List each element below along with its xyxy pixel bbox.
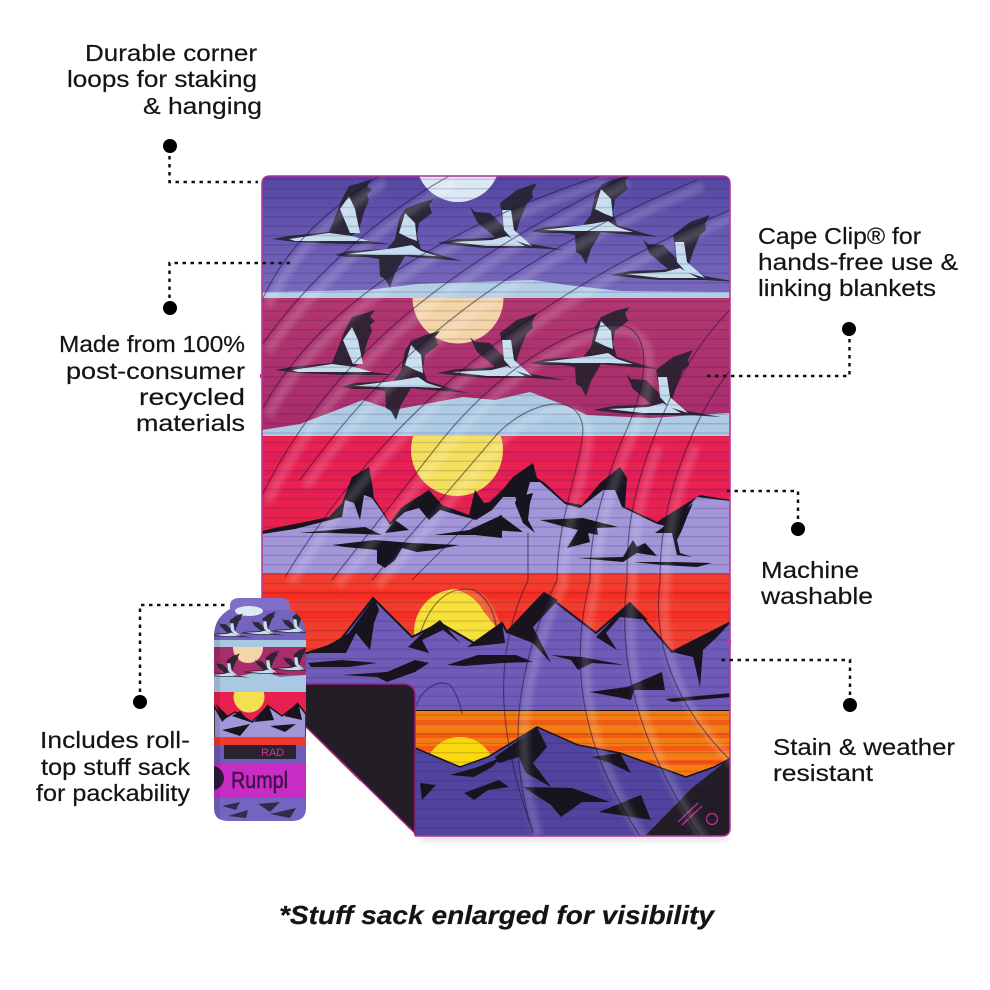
pale hills top: [262, 280, 730, 298]
heading: corner loops: & hanging: [143, 93, 262, 119]
band: purple sky: [262, 176, 730, 298]
moon: [420, 176, 496, 202]
heading: stain resistant: [773, 734, 955, 786]
folded underside: [306, 683, 418, 836]
heading: machine washable: [760, 557, 873, 609]
sack sleeve: [214, 763, 306, 798]
heading: cape clip: [758, 223, 958, 301]
sack lower purple: [214, 746, 306, 764]
heading: cape clip: Cape Clip® for: [758, 223, 921, 249]
band: orange sky: [262, 711, 730, 781]
corner logo: [678, 803, 718, 825]
lavender mountains: [262, 482, 730, 573]
sun: yellow low: [430, 737, 490, 766]
black shapes middle: [308, 592, 731, 702]
sack shading: [214, 597, 220, 823]
sack body purple: [214, 597, 306, 823]
sack cap: [228, 598, 292, 610]
stuff sack: [214, 598, 306, 821]
sack orange band: [214, 737, 306, 746]
heading: machine washable: Machine: [761, 557, 859, 583]
dark purple mountains: [415, 727, 733, 838]
band: red orange sky: [262, 573, 730, 652]
heading: corner loops: [67, 40, 262, 119]
band: magenta sky: [262, 298, 730, 436]
sack label: [224, 745, 296, 759]
sun lobe highlight: [456, 588, 499, 626]
band: red sky: [262, 436, 730, 531]
stripes: [262, 176, 730, 836]
sack birds two: [214, 648, 306, 678]
sun: yellow middle: [414, 589, 500, 642]
corner patch: [645, 758, 730, 836]
sack label text: RAD: [261, 747, 284, 759]
birds row one: [272, 175, 738, 288]
sack mountains: [214, 704, 306, 738]
purple mountains: [262, 593, 731, 711]
leader: recycled: [163, 263, 290, 315]
heading: recycled materials: post-consumer: [66, 358, 245, 384]
quilting soft highlights: [268, 182, 736, 842]
heading: stain resistant: resistant: [773, 760, 874, 786]
heading: corner loops: loops for staking: [67, 66, 257, 92]
sack ridges: [216, 702, 302, 736]
sack logo badge: [200, 766, 224, 790]
heading: corner loops: Durable corner: [85, 40, 257, 66]
sack moon: [235, 606, 263, 616]
heading: recycled materials: recycled: [139, 384, 245, 410]
heading: cape clip: hands-free use &: [758, 249, 958, 275]
heading: stuff sack: for packability: [36, 780, 191, 806]
blanket: [262, 176, 730, 836]
leader: corner loops: [163, 139, 258, 182]
heading: machine washable: washable: [760, 583, 873, 609]
sack birds: [214, 612, 306, 638]
sack cream sun: [233, 647, 263, 663]
heading: recycled materials: materials: [136, 410, 245, 436]
black shapes low: [420, 727, 651, 820]
heading: stain resistant: Stain & weather: [773, 734, 955, 760]
heading: stuff sack: Includes roll-: [40, 727, 190, 753]
leader: washable: [727, 491, 805, 536]
heading: recycled materials: Made from 100%: [59, 331, 245, 357]
blanket edge: [262, 176, 730, 836]
sack red band: [214, 692, 306, 720]
pale hills middle: [262, 392, 730, 436]
heading: stuff sack: top stuff sack: [41, 754, 191, 780]
birds row two: [275, 307, 721, 420]
sack pale band: [214, 640, 306, 647]
sack magenta band: [214, 647, 306, 675]
leader: stuff sack: [133, 605, 225, 709]
sack yellow sun: [234, 682, 264, 712]
sun: yellow top: [411, 436, 503, 496]
heading: cape clip: linking blankets: [758, 275, 936, 301]
black shapes upper band: [299, 493, 712, 568]
black ridge outline: [262, 463, 730, 540]
leader: cape clip: [705, 322, 856, 376]
heading: recycled materials: [59, 331, 245, 436]
sack brand: Rumpl: [231, 767, 288, 793]
footnote: *Stuff sack enlarged for visibility: [279, 900, 716, 930]
sack pale band two: [214, 671, 306, 692]
heading: stuff sack: [36, 727, 191, 806]
quilting seams: [262, 176, 730, 836]
cape clip marks: [260, 374, 731, 644]
sack bottom: [222, 802, 296, 818]
leader: stain: [718, 660, 857, 712]
blanket shadow: [420, 836, 728, 840]
sun: cream: [412, 298, 504, 344]
